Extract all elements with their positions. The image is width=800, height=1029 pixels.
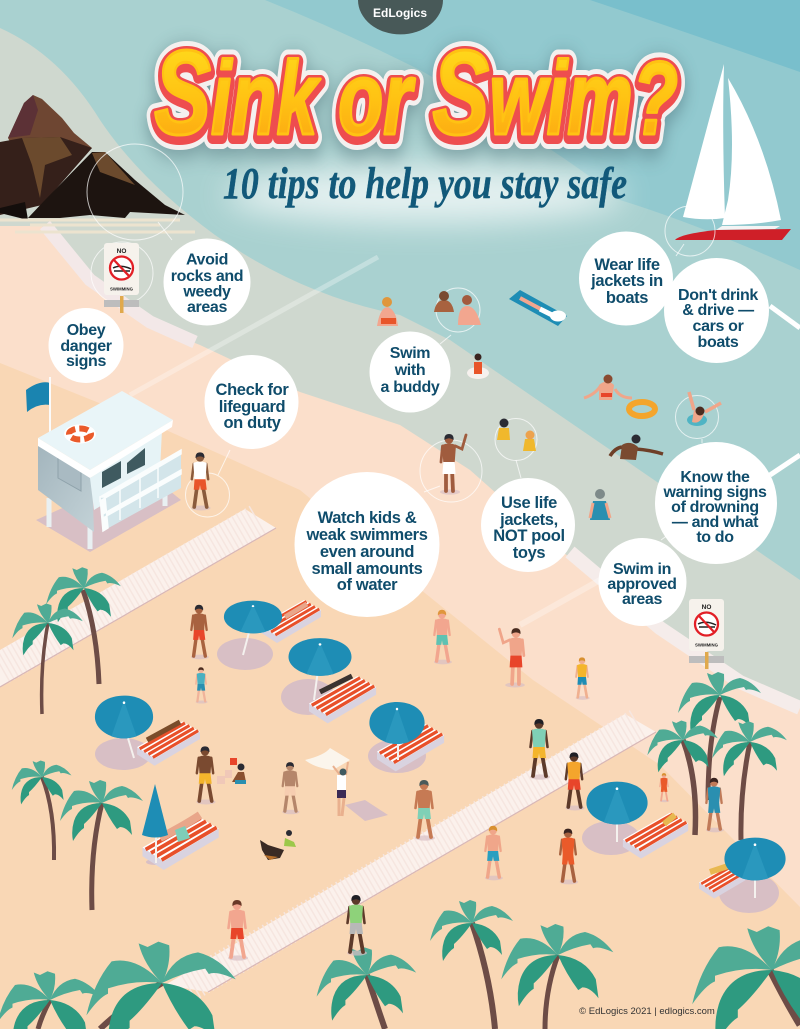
swimmer: woman in teal swimsuit [590, 489, 610, 520]
tip: watch kids: even around [320, 543, 414, 561]
highlight ring: kids in life jackets [495, 418, 537, 460]
tip: warning signs of drowning [655, 442, 777, 564]
tip: avoid rocks: Avoid [186, 252, 228, 268]
kids in life jackets [497, 418, 536, 451]
tip: check for lifeguard [204, 355, 298, 449]
tip: don't drink and drive: boats [698, 334, 739, 351]
tip: swim with a buddy [370, 332, 450, 412]
tip: obey danger signs [48, 308, 124, 383]
person: bearded man waving [499, 628, 525, 688]
no swimming sign: upper: SWIMMING [110, 286, 134, 292]
highlight ring: rocks [87, 144, 183, 240]
person: walker in yellow top [576, 657, 590, 700]
tip: warning signs of drowning: warning signs [662, 484, 767, 501]
tip: swim with a buddy: Swim [390, 345, 430, 362]
glow behind subtitle [225, 167, 625, 223]
person: waving adult [440, 434, 466, 495]
swimmer: man with arms out [610, 434, 663, 460]
person: lifeguard [191, 452, 211, 510]
palm: right cluster [647, 672, 787, 840]
no swimming sign: lower [689, 599, 724, 669]
highlight ring: buddies [436, 288, 480, 332]
title: Sink or Swim? [154, 27, 678, 161]
child in swim ring [467, 354, 489, 379]
tip: don't drink and drive: Don't drink [678, 287, 758, 304]
connector lines [158, 222, 702, 540]
subtitle: 10 tips to help you stay safe [223, 159, 627, 208]
person: walker in orange shirt [565, 752, 585, 810]
tip: watch kids: small amounts [312, 560, 423, 578]
tip: watch kids [294, 472, 440, 617]
person: man walking [191, 605, 209, 659]
tip: don't drink and drive [664, 258, 769, 363]
tip: watch kids: Watch kids & [318, 509, 417, 527]
person: woman in teal bikini [434, 610, 452, 664]
tip: warning signs of drowning: of drowning [671, 499, 759, 516]
tip: swim in approved areas: approved [607, 576, 677, 593]
tip: use life jackets: jackets, [499, 511, 558, 529]
umbrella and lounger 4 [368, 702, 444, 773]
tip: obey danger signs: danger [60, 338, 112, 355]
person: man in blue shorts [485, 826, 503, 880]
logo badge [358, 0, 443, 34]
tip: check for lifeguard: Check for [216, 381, 289, 399]
highlight ring: lifeguard [186, 473, 230, 517]
person: woman in orange swimsuit [560, 829, 578, 884]
umbrella and lounger 6 [582, 782, 688, 859]
tip: avoid rocks [164, 238, 250, 326]
highlight ring: boat [665, 206, 715, 256]
towel and kid [305, 748, 388, 821]
person: man catching towel [282, 762, 299, 814]
no swimming sign: lower: SWIMMING [695, 642, 719, 648]
person: child in red swimsuit [660, 773, 669, 802]
palms: bottom row [0, 900, 800, 1029]
title: Sink or Swim? [154, 36, 678, 170]
tip: wear life jackets in boats: Wear life [594, 256, 660, 274]
swimmers: two buddies [434, 291, 481, 325]
person: walker in mint shirt [530, 719, 550, 780]
tip: obey danger signs: Obey [67, 322, 106, 339]
tip: warning signs of drowning: Know the [680, 469, 750, 486]
umbrella and lounger 7 [699, 838, 786, 913]
tip: watch kids: of water [337, 576, 398, 594]
tip: swim in approved areas [598, 538, 686, 626]
no swimming sign: upper [104, 243, 139, 313]
umbrella and lounger 1 [217, 600, 321, 670]
tip: wear life jackets in boats: jackets in [590, 272, 663, 290]
no swimming sign: lower: NO [702, 604, 711, 611]
tip: warning signs of drowning: — and what [672, 514, 759, 531]
tip: swim in approved areas: Swim in [613, 561, 671, 578]
tip: watch kids: weak swimmers [305, 526, 428, 544]
palm: left pair [12, 760, 143, 910]
highlight ring: drowning swimmer [676, 396, 718, 438]
tip: swim with a buddy: a buddy [381, 379, 440, 396]
tip: obey danger signs: signs [66, 353, 106, 370]
tip: check for lifeguard: lifeguard [219, 398, 285, 416]
umbrella and lounger 3 [95, 696, 200, 770]
highlight ring: waving adult [420, 440, 482, 502]
highlight ring: sign [91, 242, 153, 304]
tip: avoid rocks: weedy [182, 284, 231, 300]
tip: wear life jackets in boats [579, 232, 673, 326]
tip: use life jackets [481, 478, 575, 572]
tip: don't drink and drive: cars or [693, 318, 744, 335]
person: man in red trunks [228, 900, 248, 961]
tip: avoid rocks: rocks and [171, 268, 243, 285]
tip: warning signs of drowning: to do [696, 529, 734, 546]
dog and sitting girl [260, 830, 296, 860]
umbrella and lounger 2 [281, 638, 376, 723]
person: child walking [196, 667, 208, 704]
person: woman in blue swimsuit [706, 778, 724, 832]
person: walker in green shirt [347, 895, 367, 956]
swimmer on raft [509, 290, 567, 326]
title: Sink or Swim? [154, 30, 678, 164]
swimmer: woman with arms out [584, 374, 632, 400]
tip: wear life jackets in boats: boats [606, 289, 648, 307]
tip: swim in approved areas: areas [622, 591, 662, 608]
tip: use life jackets: NOT pool [493, 527, 565, 545]
swimmer: woman in red bikini [377, 297, 398, 326]
tip: don't drink and drive: & drive — [682, 302, 754, 319]
lifeguard tower [26, 377, 181, 552]
sandcastle and child [217, 758, 246, 784]
tip: use life jackets: toys [513, 544, 545, 562]
tip: swim with a buddy: with [394, 362, 425, 379]
closed umbrella and lounger 5 [142, 784, 219, 870]
no swimming sign: upper: NO [117, 248, 126, 255]
person: adult at sandcastle [196, 746, 216, 804]
swim ring: orange [629, 402, 655, 416]
palm: upper boardwalk pair [12, 567, 121, 714]
boardwalk: lower [165, 714, 656, 992]
tip: avoid rocks: areas [187, 299, 227, 316]
footer credit: © EdLogics 2021 | edlogics.com [579, 1006, 715, 1017]
logo badge: EdLogics [373, 6, 427, 20]
person: man in mint shorts [415, 780, 435, 841]
tip: use life jackets: Use life [501, 494, 557, 512]
sailboat [675, 64, 791, 240]
swimmer: drowning [687, 392, 721, 426]
tip: check for lifeguard: on duty [223, 414, 282, 432]
rocks [0, 95, 195, 232]
title: Sink or Swim? [154, 30, 678, 164]
boardwalk: upper [0, 509, 276, 687]
